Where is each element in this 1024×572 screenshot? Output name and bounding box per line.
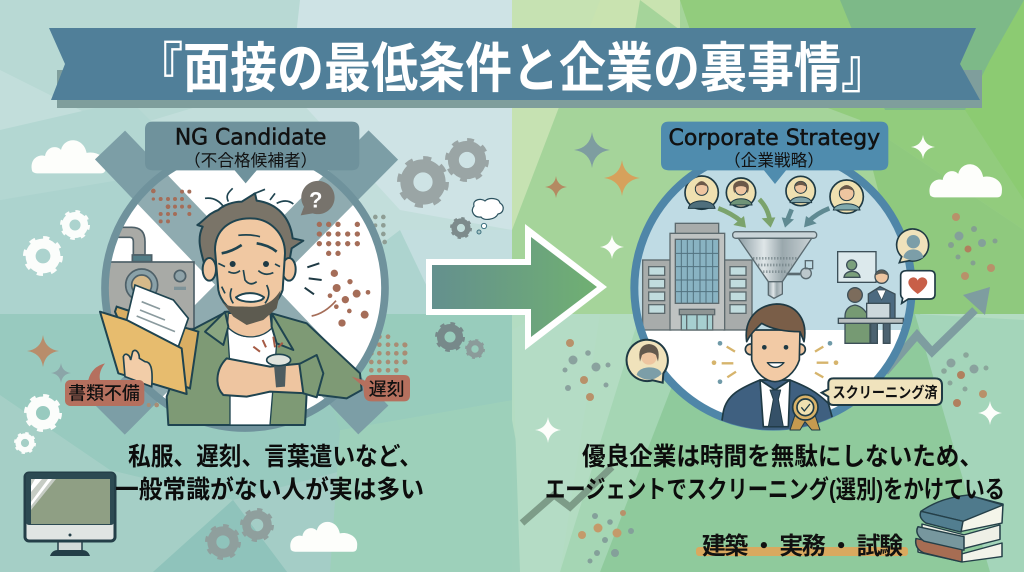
watch: [274, 365, 286, 387]
growth arrow: [885, 287, 990, 372]
brown dots: [151, 189, 370, 327]
face: [752, 330, 800, 382]
hair back: [197, 193, 303, 267]
tie: [768, 390, 783, 427]
dots bottom centre: [578, 510, 634, 564]
man: [167, 188, 362, 425]
tag: 遅刻: [352, 375, 410, 401]
hair wisps: [205, 188, 293, 207]
red alarm ticks: [253, 337, 283, 352]
circle outline: [105, 148, 385, 428]
eyes: [230, 261, 269, 267]
wrinkles: [218, 235, 280, 303]
profile bubble: [897, 229, 929, 263]
heart bubble: [901, 271, 935, 303]
jacket: [167, 312, 362, 425]
title text: 『面接の最低条件と企業の裏事情』: [136, 39, 888, 99]
growth arrow lower: [522, 467, 612, 523]
collar: [205, 312, 293, 350]
label: NG Candidate: [145, 122, 359, 183]
machine: [100, 227, 194, 329]
books icon: [916, 495, 1003, 562]
right caption: 優良企業は時間を無駄にしないため、: [582, 443, 983, 471]
sleeve cuff: [299, 355, 323, 397]
neck: [227, 313, 272, 337]
left caption: [115, 443, 424, 504]
folder front: [100, 312, 187, 394]
outer dots: [373, 215, 387, 244]
label: NG Candidate: NG Candidate: [175, 126, 326, 151]
brown dots by arrow: [402, 342, 408, 364]
ears: [203, 258, 296, 281]
circle outline: [634, 149, 912, 427]
hand: [123, 350, 152, 387]
circle interior: [106, 149, 384, 427]
background: right half: [512, 0, 1024, 572]
folder back: [115, 307, 198, 388]
woman bubble: [627, 340, 668, 383]
question bubble: ?: [309, 187, 322, 212]
face: [215, 218, 285, 317]
eyes: [762, 345, 788, 350]
label: NG Candidate: （不合格候補者）: [184, 151, 317, 170]
stress marks: [305, 263, 322, 294]
funnel: [733, 232, 817, 298]
label: corporate strategy: [661, 122, 888, 184]
sparkles centre: [535, 132, 1002, 443]
hair: [746, 304, 805, 342]
big X behind circle: [110, 145, 383, 420]
label: corporate strategy: （企業戦略）: [724, 151, 824, 170]
tag: 書類不備: [65, 363, 144, 406]
scattered dots right: [941, 213, 998, 407]
monitor icon: [25, 473, 115, 556]
gears centre top: [400, 141, 486, 205]
ground: [645, 330, 901, 413]
badge: screening done: [822, 378, 942, 405]
label: corporate strategy: Corporate Strategy: [668, 126, 880, 151]
mouth: [236, 293, 264, 302]
right caption: [545, 443, 1005, 504]
businessman: [720, 304, 837, 433]
candidate avatars: [685, 176, 863, 213]
title banner: [49, 28, 982, 108]
panel: NG candidate: [65, 122, 410, 428]
left sparkles: [27, 335, 71, 383]
gears centre bottom: [437, 324, 484, 358]
shirt: [760, 380, 790, 427]
decorative white gears left: [15, 212, 88, 453]
background: left half: [0, 0, 512, 572]
outer brown dots: [147, 334, 407, 407]
suit: [720, 380, 837, 433]
cloud upper left: [32, 140, 106, 173]
arrow: [426, 224, 607, 350]
rosette: [790, 415, 820, 430]
footer tags: 建築 ・ 実務 ・ 試験: [702, 533, 903, 560]
funnel arrows: [718, 199, 829, 222]
beard: [221, 290, 281, 325]
left caption: 一般常識がない人が実は多い: [115, 475, 424, 504]
forearm and fist: [217, 358, 308, 397]
dots near centre right: [562, 339, 610, 401]
document: [127, 285, 188, 347]
left caption: 私服、遅刻、言葉遣いなど、: [128, 443, 422, 471]
building: [643, 223, 752, 330]
ears: [745, 344, 805, 355]
interview scene: [838, 252, 903, 343]
panel: corporate strategy: [627, 122, 942, 433]
X inside circle: [138, 176, 353, 399]
eyebrows: [222, 243, 277, 253]
funnel holes: [753, 258, 797, 272]
tag: 遅刻: 遅刻: [369, 379, 405, 399]
badge: screening done: スクリーニング済: [832, 383, 938, 401]
cloud bottom: [290, 522, 357, 552]
question bubble: [301, 181, 335, 215]
tag: 書類不備: 書類不備: [68, 383, 140, 403]
cloud upper right: [930, 164, 1002, 197]
circle interior: [635, 150, 911, 426]
funnel arrow heads: [733, 216, 817, 228]
ray dots: [712, 341, 838, 384]
smile: [767, 363, 784, 367]
t-shirt: [227, 327, 277, 425]
gears bottom: [207, 510, 272, 558]
sparkle rays: [722, 347, 828, 377]
thought cloud with gear: [451, 199, 503, 238]
